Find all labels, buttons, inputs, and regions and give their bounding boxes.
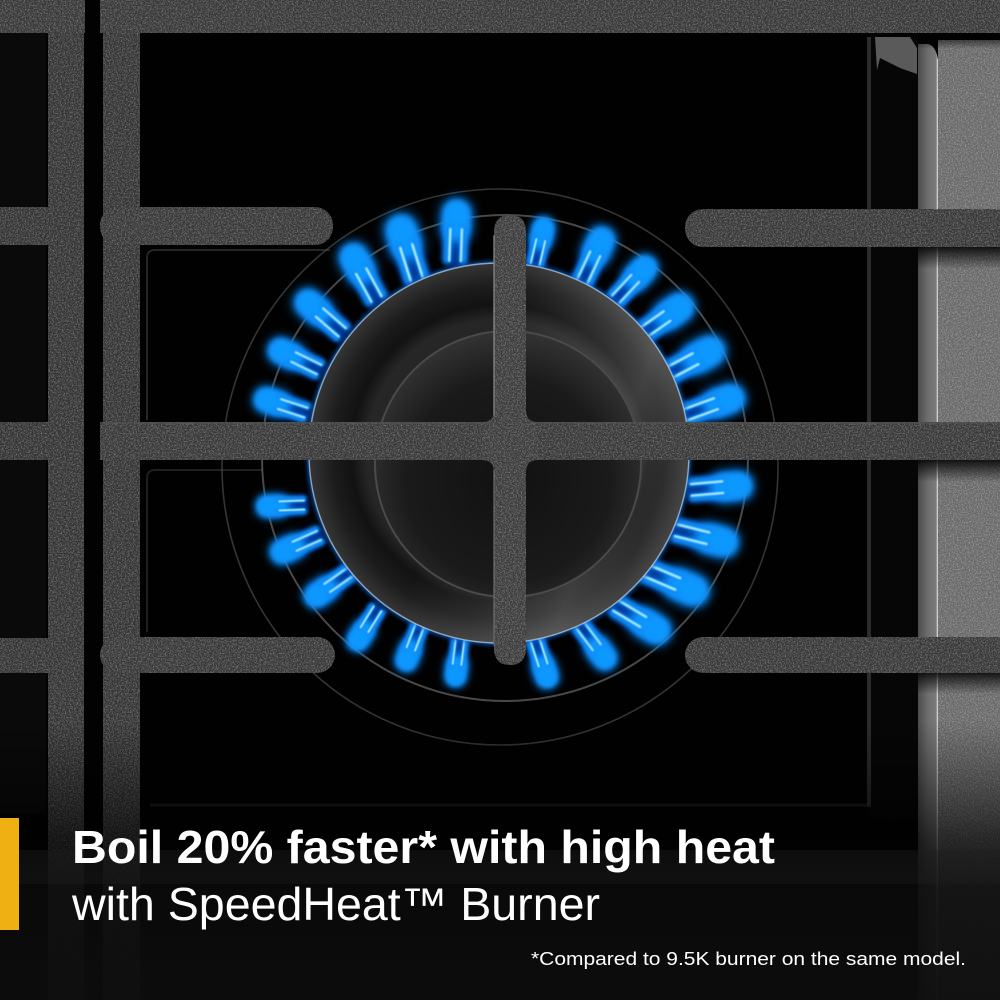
grate: top rail [0,0,1000,33]
grate: edge highlights [104,236,1000,645]
heading: Boil 20% faster* with high heat [72,821,775,873]
burner: outer glass rings [222,189,778,745]
burner: cap [307,261,691,645]
subheading: with SpeedHeat™ Burner [71,878,600,930]
gap between grates [85,0,100,1000]
grate: left vertical bars [48,33,140,1000]
footnote: *Compared to 9.5K burner on the same model. [531,948,966,969]
panel: right metal side [918,33,1000,1000]
bottom fade [0,720,1000,1000]
grate: center vertical arm [482,215,538,665]
panel: cooktop well [0,33,918,817]
faint lower grate rail [0,850,1000,884]
accent: yellow bar [0,818,19,930]
grate: main horizontal arms [100,207,1000,673]
grate: left section cross bars [0,207,80,673]
burner: blue flames [249,197,755,693]
